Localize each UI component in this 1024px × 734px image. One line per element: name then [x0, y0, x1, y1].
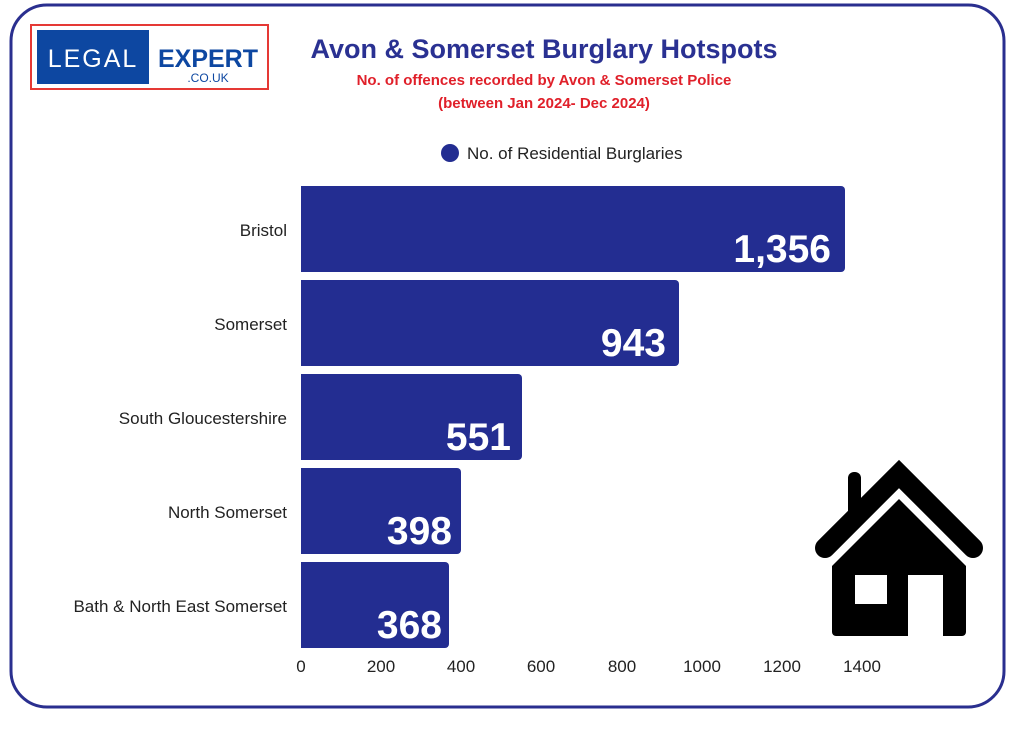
x axis labels: 1400 — [843, 657, 881, 676]
x axis labels: 1200 — [763, 657, 801, 676]
bar chart — [73, 186, 881, 676]
x axis labels: 800 — [608, 657, 636, 676]
x axis labels: 200 — [367, 657, 395, 676]
value labels: 551 — [446, 416, 511, 459]
value labels: 368 — [377, 604, 442, 647]
logo — [31, 25, 268, 89]
category labels: Bath & North East Somerset — [73, 597, 287, 616]
logo: EXPERT — [158, 45, 258, 73]
subtitle — [357, 72, 731, 112]
value labels — [377, 228, 831, 647]
value labels: 398 — [387, 510, 452, 553]
icon: house — [825, 472, 973, 637]
legend: No. of Residential Burglaries — [467, 144, 682, 163]
value labels: 1,356 — [733, 228, 831, 271]
category labels: Somerset — [214, 315, 287, 334]
bars — [301, 186, 845, 648]
subtitle: (between Jan 2024- Dec 2024) — [438, 95, 650, 112]
category labels — [73, 221, 287, 616]
x axis labels: 1000 — [683, 657, 721, 676]
value labels: 943 — [601, 322, 666, 365]
category labels: North Somerset — [168, 503, 287, 522]
title: Avon & Somerset Burglary Hotspots — [310, 34, 778, 64]
category labels: Bristol — [240, 221, 287, 240]
subtitle: No. of offences recorded by Avon & Somerset Police — [357, 72, 731, 89]
x axis labels: 400 — [447, 657, 475, 676]
x axis labels: 600 — [527, 657, 555, 676]
x axis labels — [296, 657, 881, 676]
category labels: South Gloucestershire — [119, 409, 287, 428]
logo: .CO.UK — [187, 71, 229, 85]
x axis labels: 0 — [296, 657, 306, 676]
logo: LEGAL — [48, 45, 138, 73]
